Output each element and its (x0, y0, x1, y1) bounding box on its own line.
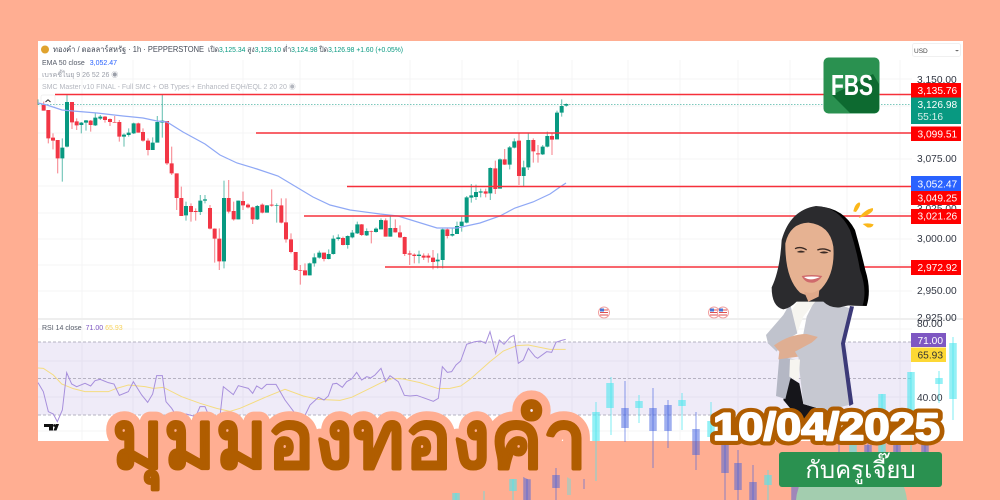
left sleeve (766, 303, 797, 352)
indicator legend: SMC: SMC Master v10 FINAL - Full SMC + OB Types + Enhanced EQH/EQL 2 20 20 ◉ (42, 83, 296, 91)
price tag: 3,049.25: 3,049.25 (918, 194, 957, 204)
price tag: EMA 3,052.47: 3,052.47 (918, 180, 957, 190)
candlesticks: left section (38, 95, 357, 285)
panel: trading chart (38, 41, 963, 441)
title: มุมมองทองคำ (112, 395, 587, 491)
currency selector: USD (914, 48, 928, 55)
price tag: 3,021.26 (911, 209, 961, 224)
price axis labels: 2,925.00 (917, 313, 957, 324)
chart header: symbol and OHLC: ทองคำ / ดอลลาร์สหรัฐ · 1h · PEPPERSTONE (53, 44, 204, 54)
shirt (790, 297, 819, 334)
price axis labels: 2,950.00 (917, 286, 957, 297)
chart header: symbol and OHLC: เปิด3,125.34 สูง3,128.10 ต่ำ3,124.98 ปิด3,126.98 +1.60 (+0.05%) (208, 44, 403, 54)
price axis labels: 3,000.00 (917, 234, 957, 245)
forearms and hand (774, 334, 823, 359)
RSI legend: RSI 14 close 71.00 65.93 (42, 325, 123, 332)
RSI tag: 65.93 (911, 348, 946, 362)
last price line (38, 104, 912, 106)
RSI axis labels: 40.00 (917, 393, 943, 404)
title: มุมมองทองคำ (112, 395, 587, 491)
icon: FBS logo: FBS (831, 70, 873, 102)
indicator legend: pivot: เบรคชี้ในยุ 9 26 52 26 ◉ (42, 68, 118, 79)
price tag: EMA 3,052.47 (911, 176, 961, 191)
price tag: last price (911, 98, 961, 124)
RSI tag: 71.00 (911, 333, 946, 347)
RSI moving average line (38, 345, 566, 411)
RSI axis labels: 80.00 (917, 319, 943, 330)
candlesticks: right section (362, 99, 566, 269)
icon: US event flags (598, 307, 728, 318)
price axis labels: 3,150.00 (917, 75, 957, 86)
indicator legend: EMA: EMA 50 close 3,052.47 (42, 60, 117, 67)
price tag: 2,972.92: 2,972.92 (918, 263, 957, 274)
eyebrows (795, 248, 831, 251)
right sleeve (795, 308, 843, 366)
face (785, 223, 834, 295)
icon: yellow sparks (853, 202, 874, 228)
RSI tag: 71.00: 71.00 (918, 336, 943, 347)
icon: FBS logo (824, 58, 880, 114)
support and resistance lines (55, 94, 912, 267)
jacket stripe (841, 306, 854, 406)
collapse button (41, 95, 55, 107)
icon: TradingView logo (44, 424, 59, 430)
hill behind button (796, 480, 907, 500)
RSI axis labels (917, 319, 943, 404)
panel: RSI indicator (38, 319, 946, 423)
price tag: 3,135.76 (911, 83, 961, 98)
price axis labels: 3,025.00 (917, 204, 957, 215)
price tag: last price: 55:16 (918, 112, 943, 123)
RSI tag: 65.93: 65.93 (918, 350, 943, 362)
hair (772, 206, 864, 309)
price axis labels (917, 75, 957, 324)
hair shadow (820, 207, 869, 306)
date: 10/04/2025 (713, 406, 940, 449)
price axis labels: 3,075.00 (917, 154, 957, 165)
price tag: 3,099.51 (911, 126, 961, 141)
lips (802, 275, 822, 283)
EMA 50 line (38, 103, 566, 228)
price tag: 2,972.92 (911, 260, 961, 275)
decorative translucent candles (456, 337, 953, 500)
price tag: last price: 3,126.98 (918, 100, 957, 111)
RSI line (38, 332, 566, 423)
price tag: 3,099.51: 3,099.51 (918, 130, 957, 140)
jacket body (798, 297, 853, 411)
date: 10/04/2025 (713, 406, 940, 449)
badge: presenter name: กับครูเจี๊ยบ (805, 452, 916, 485)
eyes (797, 251, 829, 253)
shirt lower (789, 359, 800, 382)
jacket left flap (776, 357, 798, 399)
presenter portrait (766, 206, 869, 428)
price tag: 3,135.76: 3,135.76 (918, 86, 957, 97)
badge: presenter name (779, 452, 942, 487)
price tag: 3,049.25 (911, 191, 961, 205)
chart header: symbol and OHLC (41, 44, 403, 54)
trousers (783, 377, 843, 428)
currency selector (912, 44, 960, 56)
price tag: 3,021.26: 3,021.26 (918, 212, 957, 222)
neck (804, 289, 819, 302)
